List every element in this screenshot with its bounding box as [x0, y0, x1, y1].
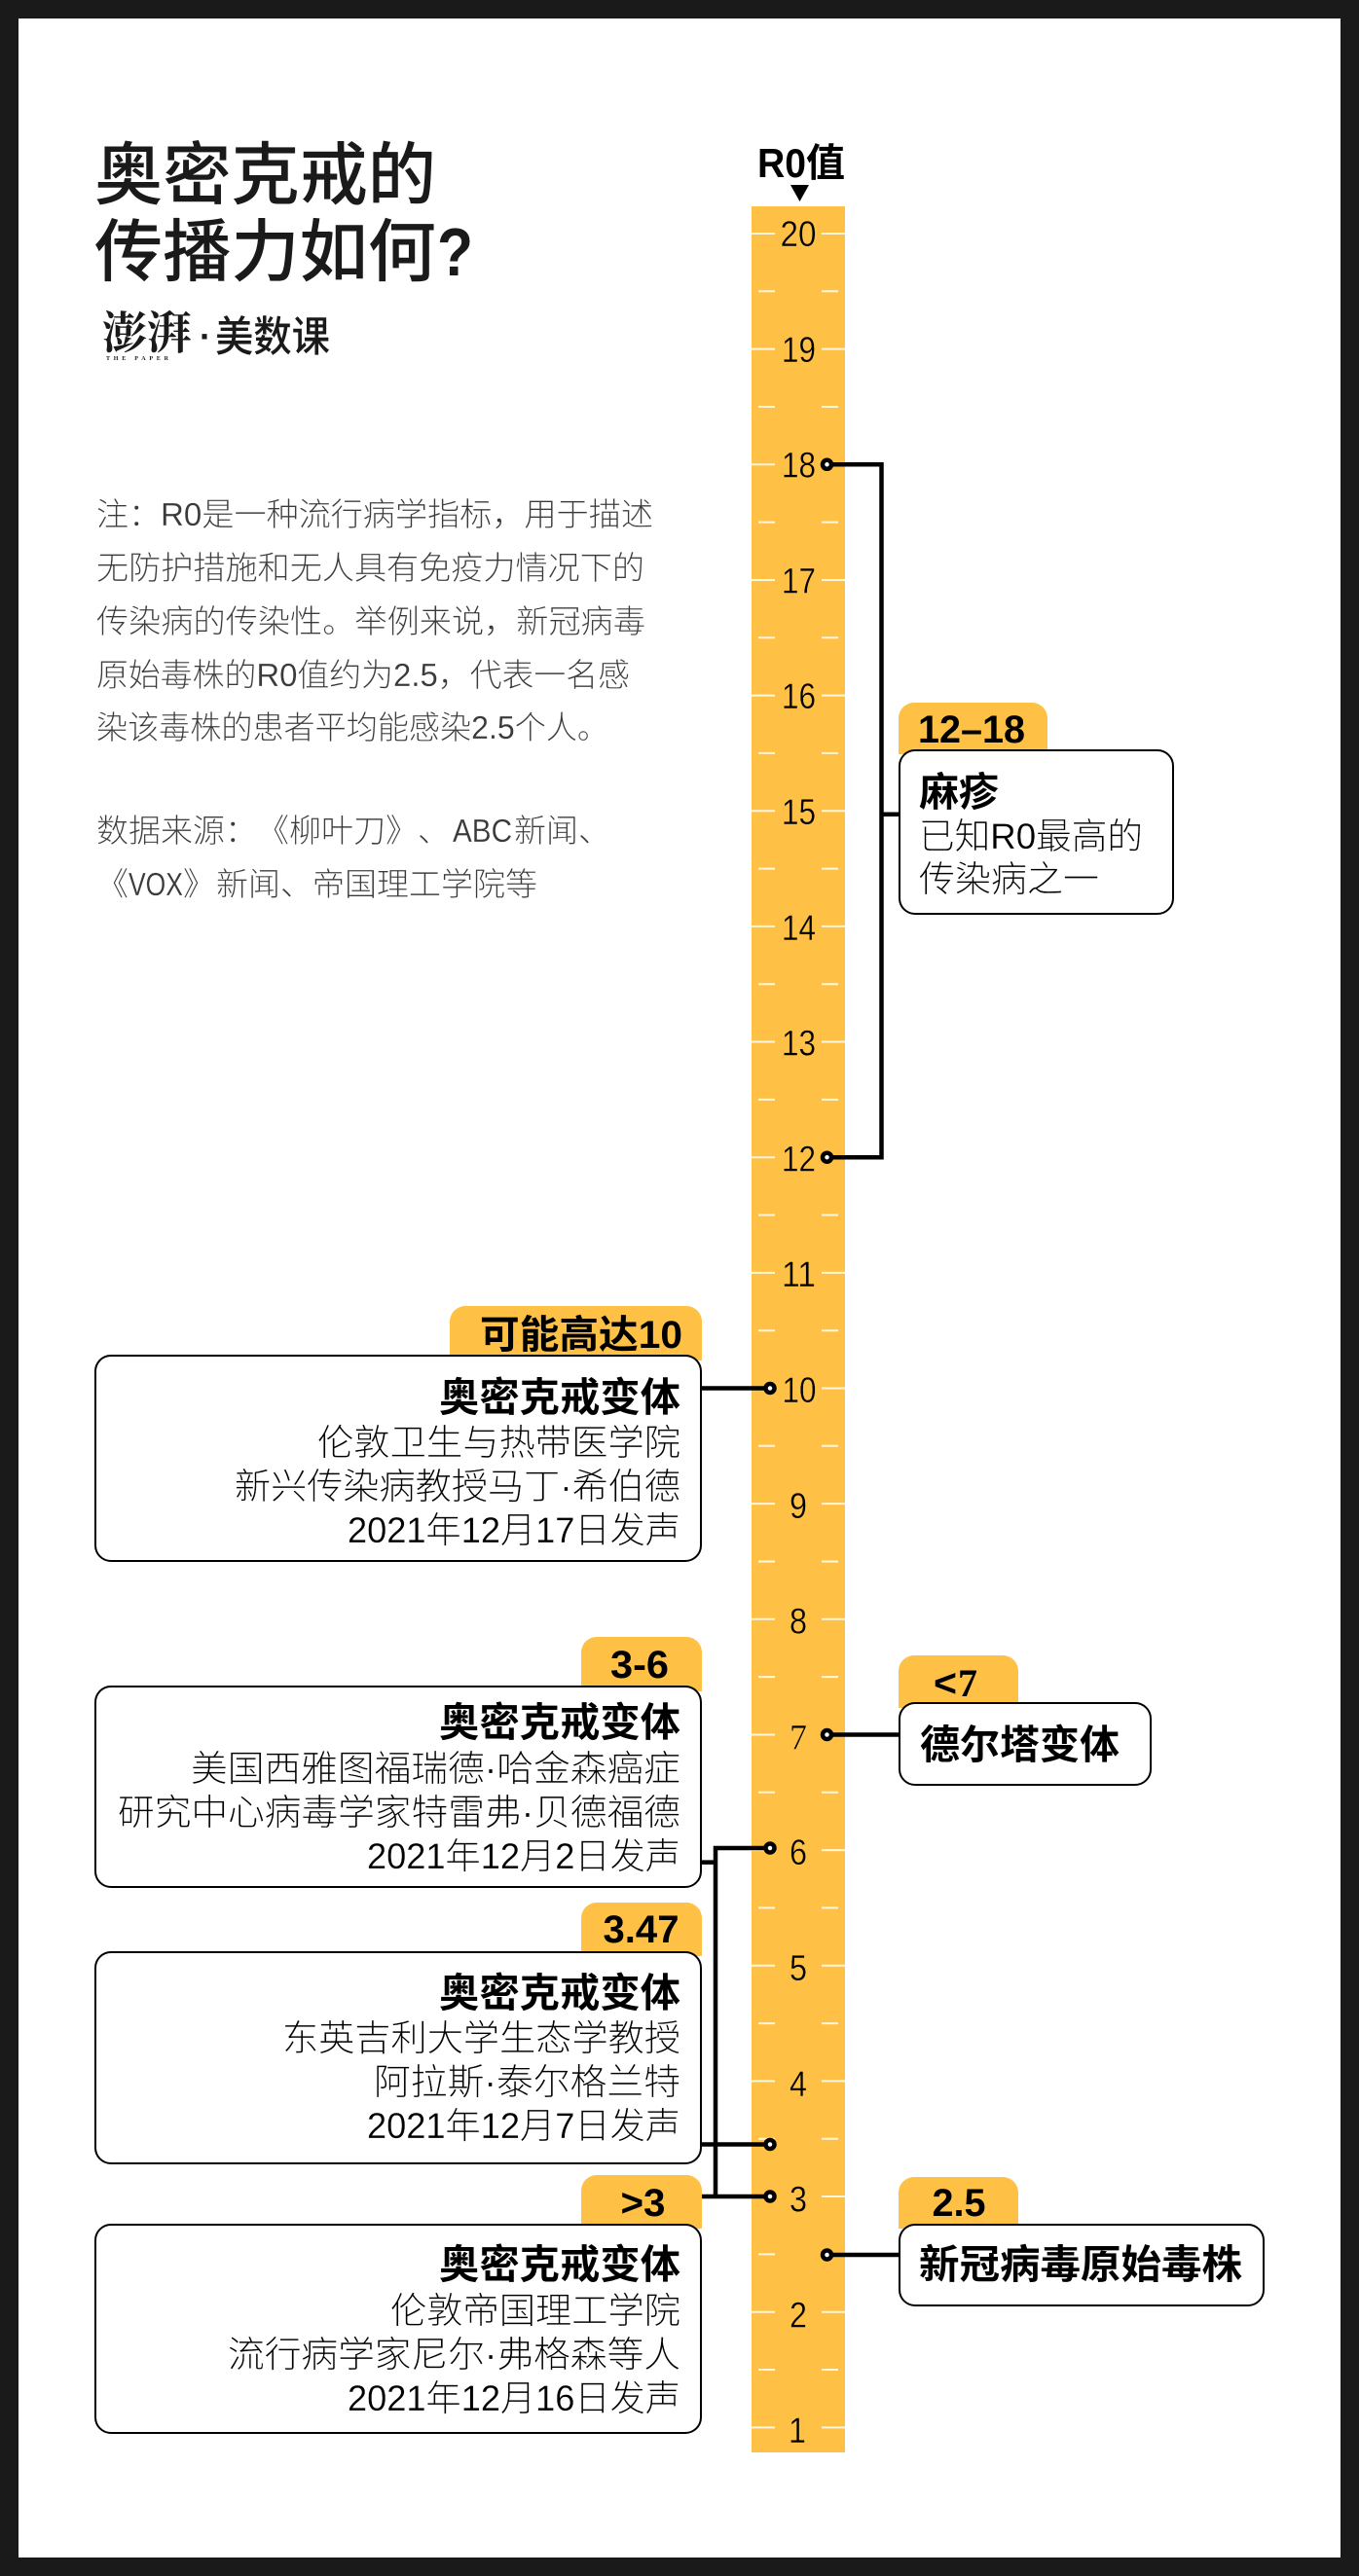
panel: omicron, Fred Hutch: 研究中心病毒学家特雷弗·贝德福德 [118, 1793, 680, 1832]
tag: 可能高达10: 可能高达10 [480, 1314, 682, 1357]
tag: >3: >3 [621, 2182, 666, 2225]
tag: <7: < [934, 1662, 957, 1705]
scale numbers: 6 [790, 1832, 807, 1872]
scale numbers: 9 [790, 1486, 807, 1526]
tag: 3.47 [581, 1903, 702, 1956]
tag: 3-6 [581, 1637, 702, 1691]
connector: omicron 10 [701, 1384, 775, 1393]
scale numbers: 5 [790, 1948, 807, 1988]
panel: omicron, Fred Hutch: 奥密克戒变体 [439, 1700, 680, 1745]
panel: measles: 麻疹 [919, 770, 999, 815]
tag: 3-6: 3-6 [610, 1644, 669, 1687]
icon: down arrow [790, 185, 809, 201]
ruler heading: R0值: R0 [757, 140, 806, 186]
scale numbers: 17 [782, 561, 816, 600]
scale numbers: 3 [790, 2180, 807, 2220]
note text: 染该毒株的患者平均能感染2.5个人。 [96, 709, 608, 745]
scale numbers: 10 [783, 1370, 816, 1410]
scale numbers: 8 [790, 1602, 807, 1642]
connector: delta [823, 1730, 900, 1739]
scale numbers: 20 [781, 214, 816, 254]
tag: <7 [899, 1655, 1018, 1708]
tag: 12–18: 12–18 [918, 708, 1025, 751]
panel: omicron, London School of Hygiene: 2021年12月17日发声 [348, 1510, 680, 1550]
connector: measles 12-18 [823, 460, 900, 1162]
data sources: 柳叶刀 [289, 813, 386, 849]
title: 奥密克戒的 [94, 137, 436, 213]
panel: delta variant [899, 1655, 1151, 1785]
tag: 2.5: 2.5 [933, 2182, 985, 2225]
panel: omicron, University of East Anglia [95, 1903, 702, 2163]
logo: The Paper · 美数课: 澎湃 [102, 298, 192, 362]
panel: measles: 已知R0最高的 [919, 816, 1143, 856]
data sources: 》 [386, 813, 418, 849]
title [94, 137, 473, 290]
scale numbers: 4 [790, 2064, 807, 2104]
scale numbers: 12 [782, 1139, 816, 1179]
panel: omicron, Imperial College [95, 2175, 702, 2433]
scale numbers: 1 [789, 2411, 806, 2450]
note text: 注： [96, 496, 161, 532]
tag: 2.5 [899, 2177, 1018, 2229]
scale numbers: 18 [782, 446, 816, 486]
panel: omicron, London School of Hygiene: 奥密克戒变体 [439, 1375, 680, 1420]
panel: original strain: 新冠病毒原始毒株 [919, 2242, 1242, 2287]
data sources: 《 [257, 813, 289, 849]
data sources: 、 [418, 813, 450, 849]
panel: omicron, London School of Hygiene [95, 1306, 702, 1561]
logo: The Paper · 美数课: 美数课 [215, 314, 330, 361]
tag: >3 [581, 2175, 702, 2229]
ruler scale [752, 206, 845, 2452]
tag: 12–18 [899, 703, 1047, 754]
scale numbers: 2 [790, 2295, 807, 2335]
note text: 无防护措施和无人具有免疫力情况下的 [96, 550, 644, 586]
panel: omicron, Imperial College: 2021年12月16日发声 [348, 2378, 680, 2418]
scale numbers: 15 [782, 792, 816, 832]
scale numbers: 14 [782, 908, 816, 948]
panel: omicron, Imperial College: 伦敦帝国理工学院 [390, 2291, 680, 2331]
logo: The Paper · 美数课: · [200, 316, 211, 356]
data sources: 数据来源： [96, 813, 257, 849]
title: 传播力如何 [94, 214, 436, 290]
data sources: ABC [453, 813, 512, 849]
panel: original strain [899, 2177, 1264, 2305]
panel: omicron, London School of Hygiene: 新兴传染病教授马丁·希伯德 [235, 1467, 680, 1506]
panel: omicron, Fred Hutch [95, 1637, 702, 1887]
data sources: 《 [96, 866, 129, 902]
panel: measles: 传染病之一 [919, 859, 1099, 899]
connector: original strain [823, 2250, 900, 2260]
note text [96, 496, 653, 745]
note text: R0是一种流行病学指标，用于描述 [161, 496, 653, 532]
ruler heading: R0值 [757, 140, 845, 186]
scale numbers [781, 214, 816, 2450]
tag: <7: 7 [958, 1661, 977, 1705]
panel: omicron, Fred Hutch: 美国西雅图福瑞德·哈金森癌症 [191, 1749, 680, 1789]
logo: The Paper · 美数课: THE PAPER [106, 356, 169, 362]
panel: omicron, University of East Anglia: 东英吉利大学生态学教授 [282, 2018, 680, 2058]
connector: omicron group [701, 1843, 775, 2201]
panel: omicron, University of East Anglia: 2021年12月7日发声 [367, 2106, 680, 2146]
data sources: 新闻、帝国理工学院等 [216, 866, 537, 902]
tag: 3.47: 3.47 [604, 1908, 680, 1951]
data sources: 》 [183, 866, 215, 902]
note text: 传染病的传染性。举例来说，新冠病毒 [96, 603, 645, 639]
panel: omicron, Fred Hutch: 2021年12月2日发声 [367, 1836, 680, 1876]
panel: omicron, University of East Anglia: 奥密克戒变体 [439, 1971, 680, 2015]
scale numbers: 19 [782, 330, 816, 370]
panel: omicron, University of East Anglia: 阿拉斯·泰尔格兰特 [374, 2062, 680, 2102]
ruler heading: R0值: 值 [806, 142, 845, 185]
title: ? [437, 214, 473, 290]
panel: omicron, London School of Hygiene: 伦敦卫生与热带医学院 [317, 1423, 680, 1463]
panel: omicron, Imperial College: 流行病学家尼尔·弗格森等人 [228, 2335, 680, 2375]
scale numbers: 16 [782, 676, 816, 716]
panel: omicron, Imperial College: 奥密克戒变体 [439, 2242, 680, 2287]
tag: 可能高达10 [450, 1306, 702, 1361]
scale numbers: 11 [782, 1254, 816, 1294]
panel: delta variant: 德尔塔变体 [920, 1723, 1120, 1767]
scale numbers: 13 [782, 1024, 816, 1064]
data sources: VOX [129, 866, 183, 902]
data sources [96, 813, 610, 902]
note text: 原始毒株的R0值约为2.5，代表一名感 [96, 657, 630, 693]
scale numbers: 7 [790, 1718, 807, 1758]
panel: measles [899, 703, 1173, 914]
logo: The Paper · 美数课 [102, 298, 330, 362]
data sources: 新闻、 [514, 813, 610, 849]
